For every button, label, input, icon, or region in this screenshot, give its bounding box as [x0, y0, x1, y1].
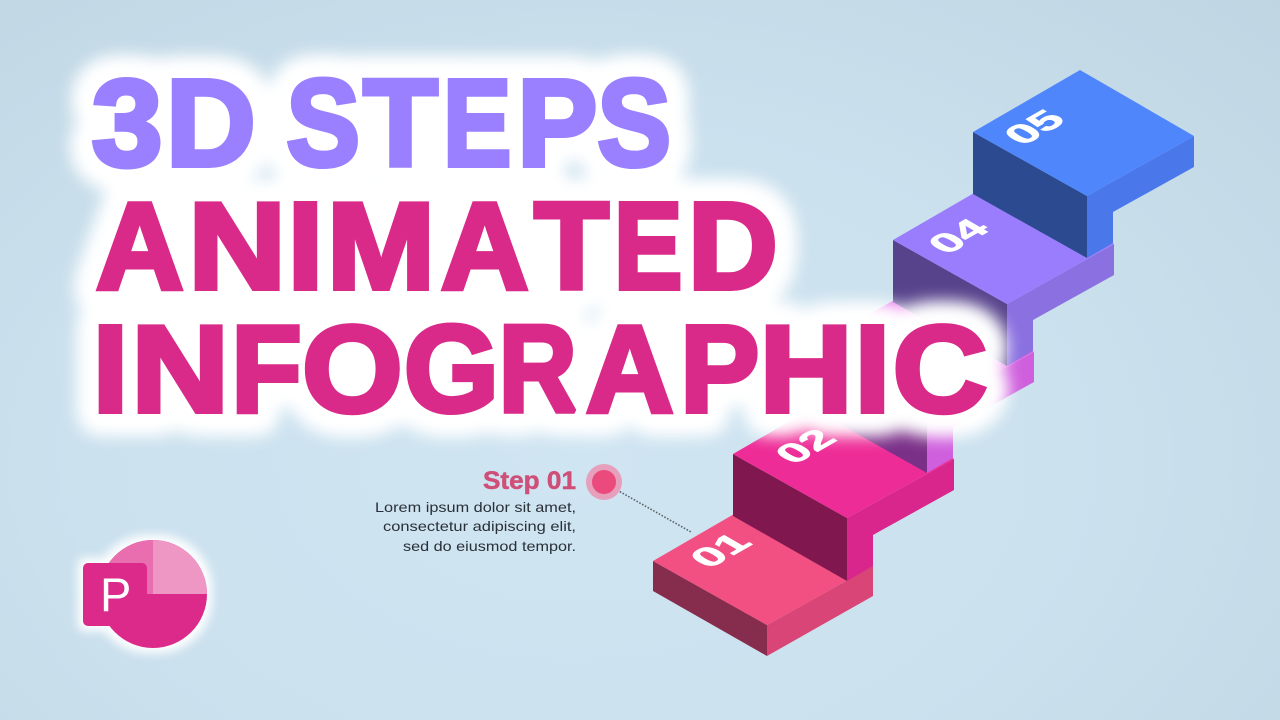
title line: 3D STEPS: 3: [92, 56, 163, 192]
callout body text: [375, 499, 576, 554]
title line: INFOGRAPHIC: A: [586, 302, 674, 438]
title line: INFOGRAPHIC: I: [93, 302, 128, 438]
callout body text: sed do eiusmod tempor.: [403, 538, 576, 554]
step 03: [813, 285, 1034, 473]
title line: ANIMATED: E: [614, 178, 682, 316]
title line: 3D STEPS: T: [363, 56, 438, 192]
icon: PowerPoint logo: P: [100, 568, 131, 621]
title line: 3D STEPS: D: [166, 56, 256, 192]
step 05: [973, 70, 1194, 258]
callout body text: consectetur adipiscing elit,: [383, 518, 576, 534]
title line: INFOGRAPHIC: I: [855, 302, 890, 438]
title line: INFOGRAPHIC: F: [231, 302, 302, 438]
title with white glow: [92, 56, 987, 438]
step 01: 01: [680, 527, 760, 573]
title line: 3D STEPS: S: [286, 56, 360, 192]
title line: ANIMATED: A: [96, 178, 184, 316]
callout marker: [586, 464, 622, 500]
stepped isometric staircase: [653, 70, 1194, 656]
title line: 3D STEPS: E: [443, 56, 511, 192]
title line: INFOGRAPHIC: N: [131, 302, 229, 438]
step 02: 02: [765, 423, 845, 469]
step 05: 05: [994, 104, 1074, 150]
step 01: [653, 499, 873, 656]
callout body text: Lorem ipsum dolor sit amet,: [375, 499, 576, 515]
title line: ANIMATED: D: [688, 178, 778, 316]
title line: ANIMATED: N: [188, 178, 286, 316]
title line: INFOGRAPHIC: C: [893, 302, 987, 438]
title line: INFOGRAPHIC: H: [760, 302, 852, 438]
title line: ANIMATED: T: [534, 178, 609, 316]
callout heading: Step 01: [483, 467, 576, 495]
title line: ANIMATED: M: [327, 178, 435, 316]
callout: step 01: [375, 464, 691, 554]
step 02: [733, 392, 954, 581]
title line: INFOGRAPHIC: G: [404, 302, 499, 438]
step 04: [893, 178, 1114, 366]
title line: INFOGRAPHIC: O: [302, 302, 403, 438]
title line: 3D STEPS: S: [597, 56, 671, 192]
title line: 3D STEPS: P: [517, 56, 597, 192]
callout leader line: [617, 490, 691, 532]
icon: PowerPoint logo: [83, 540, 207, 648]
title line: INFOGRAPHIC: R: [499, 302, 577, 438]
title line: INFOGRAPHIC: P: [680, 302, 759, 438]
title line: ANIMATED: I: [288, 178, 323, 316]
title line: ANIMATED: A: [441, 178, 528, 316]
step 04: 04: [918, 213, 998, 259]
